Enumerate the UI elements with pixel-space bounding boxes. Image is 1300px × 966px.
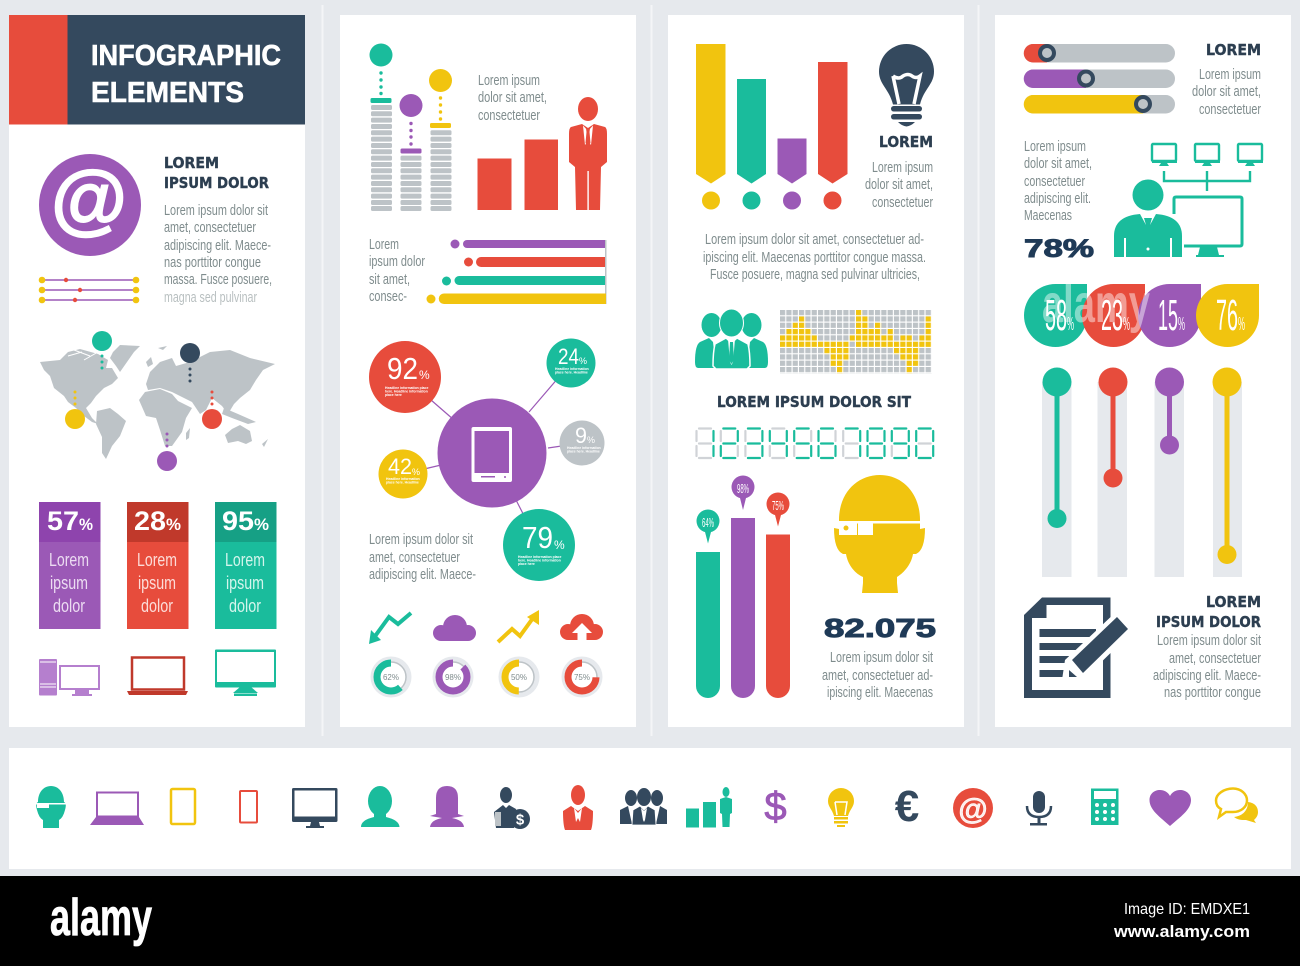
heading: lorem ipsum dolor <box>164 154 269 192</box>
heading: lorem ipsum dolor: IPSUM DOLOR <box>1156 613 1261 631</box>
drop: 76%: 76 <box>1216 291 1238 340</box>
world map <box>40 345 275 459</box>
icon: businessman red <box>563 785 593 830</box>
text block: network copy <box>1024 139 1092 224</box>
bubble: 92%: place here <box>385 393 402 397</box>
bubble: 79%: % <box>554 538 565 552</box>
text block: bars copy <box>369 237 425 305</box>
text block: slider copy <box>1192 67 1261 118</box>
stat card: 57%: dolor <box>53 596 85 616</box>
drop: 58% <box>1024 284 1087 347</box>
map pin: purple africa <box>157 432 177 471</box>
donut: 75% <box>562 656 602 698</box>
icon: monitor <box>215 650 276 696</box>
bubble: 42%: % <box>412 467 420 477</box>
text block: overview copy: magna sed pulvinar <box>164 290 257 306</box>
icon: at sign red <box>953 788 993 828</box>
stat card: 57%: Lorem <box>49 550 89 570</box>
stat card: 28%: ipsum <box>138 573 176 593</box>
text block: bubble copy: amet, consectetuer <box>369 550 460 566</box>
stat card: 28%: 28 <box>134 506 166 536</box>
icon: heart <box>1150 790 1191 826</box>
icon: document and pen <box>1024 598 1135 698</box>
text block: bars copy: ipsum dolor <box>369 254 425 270</box>
drop: 15% <box>1138 284 1201 347</box>
big number: 82.075: 82.075 <box>824 613 936 643</box>
text block: number copy: Lorem ipsum dolor sit <box>830 650 933 666</box>
drop: 76%: % <box>1238 314 1245 334</box>
text block: centered paragraph <box>703 232 926 283</box>
panel: charts <box>340 15 636 727</box>
icon: at sign red: @ <box>958 793 988 826</box>
icon: monitor navy <box>292 788 338 828</box>
icon: dollar: $ <box>764 785 787 829</box>
bar chart: red bars <box>478 140 558 210</box>
stat card: 95%: ipsum <box>226 573 264 593</box>
stat card: 57%: % <box>79 515 93 534</box>
bubble: 42%: place here. Headline <box>386 480 419 484</box>
icon: euro: € <box>895 782 919 831</box>
bubble: 42%: Headline information <box>386 477 420 481</box>
icon: rising arrow <box>498 610 539 642</box>
stat card: 28%: % <box>166 515 181 534</box>
heading: lorem ipsum dolor sit: LOREM IPSUM DOLOR SIT <box>717 393 912 411</box>
text block: bubble copy <box>369 532 476 583</box>
text block: network copy: Lorem ipsum <box>1024 139 1086 155</box>
icon: woman purple <box>430 786 464 827</box>
icon: bulb yellow <box>828 788 854 827</box>
icon: business team <box>695 309 768 369</box>
text block: bars copy: consec- <box>369 289 407 305</box>
icon: microphone <box>1027 791 1051 826</box>
icon: laptop purple <box>90 792 144 825</box>
pin: 75%: 75% <box>772 498 784 513</box>
text block: document copy <box>1153 633 1261 701</box>
icon: glasses head <box>36 786 66 828</box>
digital counter <box>696 428 933 458</box>
text block: columns copy <box>478 73 547 124</box>
bubble: 79%: Headline information place <box>518 555 561 559</box>
bubble: 42%: 42 <box>388 454 412 479</box>
drop: 58%: 58 <box>1045 291 1067 340</box>
icon: calculator <box>1091 788 1118 825</box>
bubble: 79%: here. Headline information <box>518 558 561 562</box>
stat card: 95%: dolor <box>229 596 261 616</box>
bubble: 24%: % <box>579 356 587 366</box>
icon: businessman with dollar coin: $ <box>516 812 525 828</box>
icon: cloud <box>433 615 476 641</box>
footer bar <box>0 876 1300 966</box>
drop: 15%: % <box>1178 314 1185 334</box>
text block: bulb copy: consectetuer <box>872 195 933 211</box>
drop: 23%: 23 <box>1101 291 1123 340</box>
bubble: 9%: % <box>587 435 595 445</box>
text block: bulb copy: dolor sit amet, <box>865 177 933 193</box>
icon: businessman with dollar coin <box>494 787 530 829</box>
bubble: 24%: place here. Headline <box>555 370 588 374</box>
text block: network copy: consectetuer <box>1024 174 1085 190</box>
heading: lorem ipsum dolor: LOREM <box>1206 593 1261 611</box>
text block: slider copy: dolor sit amet, <box>1192 84 1261 100</box>
drop: 23% <box>1082 284 1145 347</box>
donut: 62%: 62% <box>383 673 399 682</box>
text block: bars copy: sit amet, <box>369 272 410 288</box>
bubble: 79%: place here <box>518 562 535 566</box>
text block: centered paragraph: Lorem ipsum dolor sit amet, consectetuer ad- <box>705 232 924 248</box>
stat card: 57%: ipsum <box>50 573 88 593</box>
donut: 50% <box>498 656 540 698</box>
donut: 62% <box>370 656 412 698</box>
drop: 23%: % <box>1123 314 1130 334</box>
bubble: 92%: here. Headline information <box>385 390 428 394</box>
donut: 50%: 50% <box>511 673 527 682</box>
text block: bars copy: Lorem <box>369 237 399 253</box>
stat card: 28%: Lorem <box>137 550 177 570</box>
bar chart: horizontal bars <box>426 240 606 304</box>
text block: bubble copy: Lorem ipsum dolor sit <box>369 532 473 548</box>
bubble: 42% <box>378 450 428 498</box>
icon: light bulb <box>879 44 934 126</box>
icon: laptop <box>127 658 188 695</box>
text block: slider copy: consectetuer <box>1199 102 1261 118</box>
bubble: 24%: Headline information <box>555 367 589 371</box>
bubble: 79%: 79 <box>522 520 553 555</box>
text block: overview copy <box>164 203 272 306</box>
footer logo: alamy <box>50 889 152 947</box>
donut: 98% <box>432 656 474 698</box>
bubble: 92%: Headline information place <box>385 386 428 390</box>
panel: icon strip <box>9 748 1291 869</box>
pin: 64%: 64% <box>702 515 714 530</box>
stat card: 57% <box>39 502 100 629</box>
icon: chart and man <box>686 787 732 828</box>
footer url: www.alamy.com <box>1113 922 1250 941</box>
text block: overview copy: amet, consectetuer <box>164 220 256 236</box>
stat card: 28%: dolor <box>141 596 173 616</box>
donut: 98%: 98% <box>445 673 461 682</box>
icon: cloud upload <box>560 614 603 640</box>
icon: man teal <box>361 786 400 827</box>
bubble: 24%: 24 <box>558 344 579 369</box>
title banner: INFOGRAPHIC <box>91 40 281 72</box>
bubble: 92% <box>369 341 441 413</box>
text block: bulb copy <box>865 160 933 211</box>
heading: lorem: LOREM <box>879 133 933 151</box>
title banner: ELEMENTS <box>91 77 244 109</box>
stat card: 95%: Lorem <box>225 550 265 570</box>
stat card: 28% <box>127 502 188 629</box>
heading: lorem ipsum dolor: LOREM <box>164 154 219 172</box>
icon: tablet yellow <box>171 789 195 824</box>
text block: centered paragraph: ipiscing elit. Maecenas porttitor congue massa. <box>703 250 926 266</box>
panel: data <box>995 15 1291 727</box>
bubble: 24% <box>546 338 596 388</box>
panel: ideas <box>668 15 964 727</box>
stacked columns <box>370 44 452 211</box>
stat card: 57%: 57 <box>47 506 79 536</box>
pin: 64% <box>696 510 720 544</box>
heading: lorem ipsum dolor <box>1156 593 1261 631</box>
bubble: 9%: place here. Headline <box>567 450 600 454</box>
drop: 76% <box>1196 284 1259 347</box>
drop: 15%: 15 <box>1158 291 1178 340</box>
text block: network copy: adipiscing elit. <box>1024 191 1091 207</box>
icon: businessman <box>569 97 607 210</box>
bar chart: arrow bars <box>696 44 848 210</box>
text block: columns copy: Lorem ipsum <box>478 73 540 89</box>
pin: 75% <box>766 492 790 526</box>
text block: number copy <box>822 650 933 701</box>
map pin: yellow america <box>65 390 85 429</box>
bubble: 9% <box>560 420 604 466</box>
bubble: 92%: % <box>419 368 430 382</box>
map pin: red india <box>202 390 222 429</box>
icon: at sign circle: @ <box>51 154 127 242</box>
pin: 98%: 98% <box>737 481 749 496</box>
text block: slider copy: Lorem ipsum <box>1199 67 1261 83</box>
icon: chat bubbles <box>1216 788 1258 823</box>
bubble diagram <box>369 338 604 581</box>
lollipop chart <box>1042 368 1242 577</box>
bubble: tablet hub <box>438 398 546 508</box>
text block: document copy: Lorem ipsum dolor sit <box>1157 633 1261 649</box>
stat card: 95%: % <box>254 515 269 534</box>
panel: overview <box>9 15 305 727</box>
text block: columns copy: consectetuer <box>478 108 540 124</box>
text block: network copy: dolor sit amet, <box>1024 156 1092 172</box>
bubble: 9%: Headline information <box>567 446 601 450</box>
icon: phone red <box>240 791 257 822</box>
text block: overview copy: massa. Fusce posuere, <box>164 272 272 288</box>
text block: overview copy: Lorem ipsum dolor sit <box>164 203 268 219</box>
bubble: 79% <box>503 509 575 581</box>
bubble: 9%: 9 <box>575 423 587 448</box>
text block: number copy: ipiscing elit. Maecenas <box>827 685 933 701</box>
title banner <box>9 15 305 124</box>
text block: document copy: nas porttitor congue <box>1164 685 1261 701</box>
icon: team navy <box>620 788 667 825</box>
icon: at sign circle <box>39 154 141 256</box>
icon: desktop computer <box>39 659 100 696</box>
heading: lorem ipsum dolor: IPSUM DOLOR <box>164 174 269 192</box>
watermark: alamy: alamy <box>1042 274 1150 334</box>
icon: falling arrow <box>369 613 411 644</box>
text block: centered paragraph: Fusce posuere, magna sed pulvinar ultricies, <box>710 267 920 283</box>
stat card: 95% <box>215 502 276 629</box>
text block: bubble copy: adipiscing elit. Maece- <box>369 567 476 583</box>
text block: overview copy: nas porttitor congue <box>164 255 261 271</box>
text block: document copy: adipiscing elit. Maece- <box>1153 668 1261 684</box>
text block: overview copy: adipiscing elit. Maece- <box>164 238 271 254</box>
map pin: navy asia <box>180 343 200 382</box>
text block: bulb copy: Lorem ipsum <box>872 160 933 176</box>
icon: head with smart glasses <box>834 475 925 593</box>
text block: document copy: amet, consectetuer <box>1169 651 1261 667</box>
text block: number copy: amet, consectetuer ad- <box>822 668 933 684</box>
big number: 78%: 78% <box>1024 235 1094 263</box>
map pin: teal north <box>92 331 112 370</box>
heading: lorem: LOREM <box>1206 41 1261 59</box>
footer image id: Image ID: EMDXE1 <box>1124 901 1250 918</box>
donut: 75%: 75% <box>574 673 590 682</box>
drop: 58%: % <box>1067 314 1074 334</box>
stat card: 95%: 95 <box>222 506 254 536</box>
text block: columns copy: dolor sit amet, <box>478 90 547 106</box>
slider bars <box>1024 44 1175 114</box>
text block: network copy: Maecenas <box>1024 208 1072 224</box>
pixel chart <box>780 310 932 373</box>
slider lines <box>39 277 139 303</box>
pin: 98% <box>732 476 754 510</box>
bubble: 92%: 92 <box>387 351 418 386</box>
bar chart: capsule bars <box>696 476 790 698</box>
icon: user with network of monitors <box>1114 144 1263 257</box>
